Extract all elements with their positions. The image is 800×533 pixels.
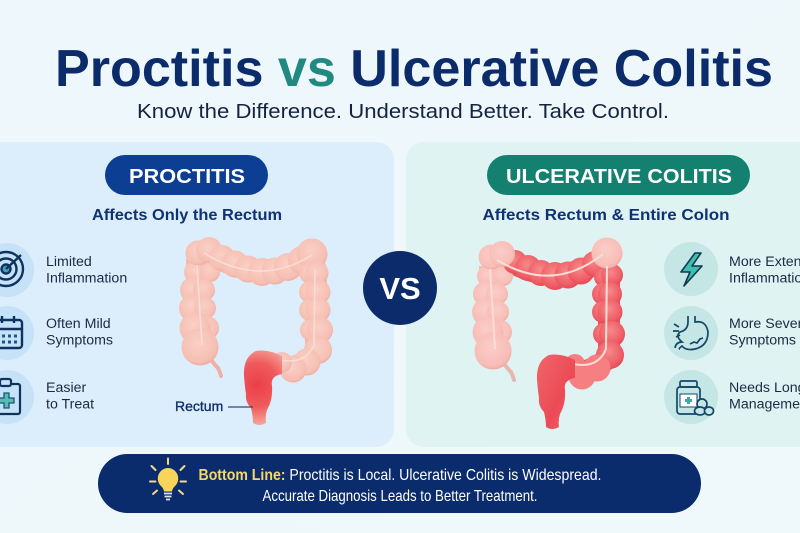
label: rectum callout [175, 398, 253, 414]
inflamed rectum [537, 355, 575, 429]
icon: lightning bolt [664, 242, 718, 296]
vs badge [363, 251, 437, 325]
icon: clipboard [0, 370, 34, 424]
inflamed rectum [244, 351, 282, 425]
text: easier to treat: Easier [46, 380, 86, 396]
icon: light bulb [150, 458, 186, 500]
vs badge: VS [379, 271, 421, 306]
proctitis pill heading [105, 155, 268, 195]
illustration: fully inflamed colon [472, 238, 625, 429]
panel: ulcerative colitis [406, 142, 800, 447]
subtitle: Know the Difference. Understand Better. Take Control. [137, 100, 669, 123]
icon: medicine bottle [664, 370, 718, 424]
bottom line banner: Accurate Diagnosis Leads to Better Treatment. [262, 488, 538, 505]
proctitis subheading: Affects Only the Rectum [92, 207, 282, 224]
ulcerative colitis pill heading: ULCERATIVE COLITIS [506, 166, 732, 188]
text: limited inflammation: Limited [46, 254, 92, 270]
text: often mild symptoms: Often Mild [46, 316, 111, 332]
text: more severe symptoms: Symptoms [729, 332, 796, 348]
bottom line text: Bottom Line: Proctitis is Local. Ulcerative Colitis is Widespread. [198, 467, 602, 484]
panel: proctitis [0, 142, 394, 447]
title: Proctitis vs Ulcerative Colitis [55, 40, 773, 98]
text: limited inflammation: Inflammation [46, 270, 127, 286]
text: often mild symptoms: Symptoms [46, 332, 113, 348]
ulcerative colitis pill heading [487, 155, 750, 195]
text: easier to treat: to Treat [46, 396, 94, 412]
ulcerative colitis subheading: Affects Rectum & Entire Colon [482, 207, 730, 224]
illustration: colon with inflamed rectum [179, 237, 333, 425]
label: rectum callout: Rectum [175, 398, 223, 414]
bottom line banner [98, 454, 701, 513]
icon: target [0, 243, 34, 297]
icon: calendar [0, 306, 34, 360]
proctitis pill heading: PROCTITIS [129, 166, 245, 188]
icon: stomach [664, 306, 718, 360]
